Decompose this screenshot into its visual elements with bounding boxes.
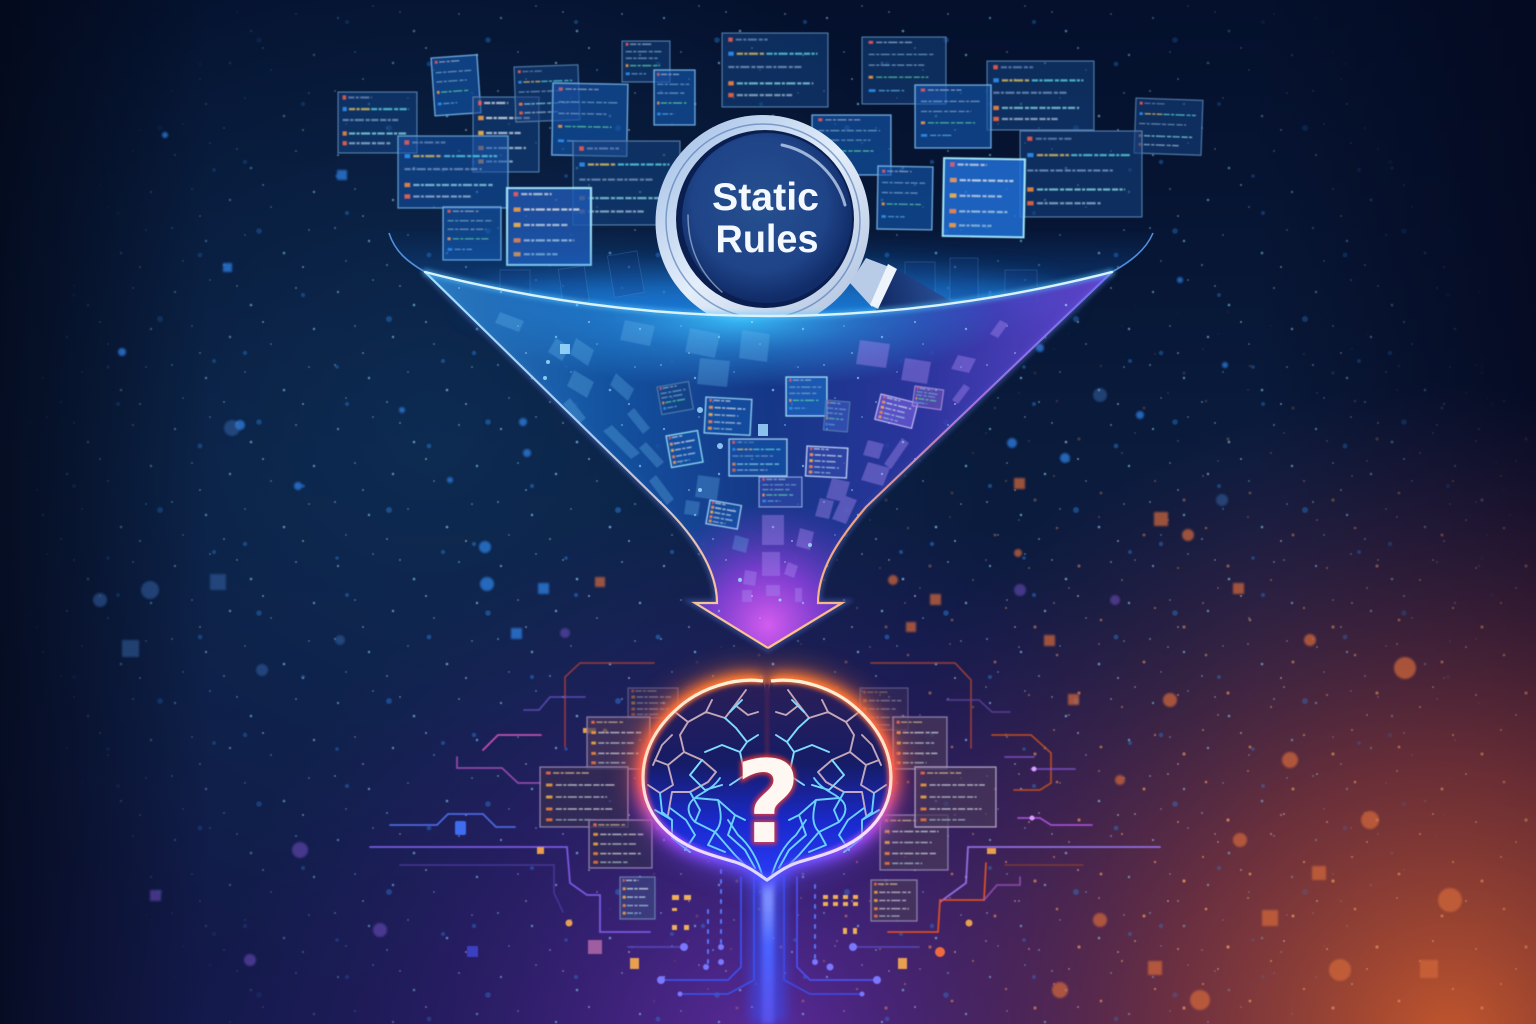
falling document 1	[786, 377, 827, 416]
magnifier label: Static Rules: Static	[712, 176, 819, 219]
document card 15	[943, 158, 1025, 237]
funnel front rim highlight	[425, 272, 1112, 316]
document card 10	[987, 61, 1094, 130]
document card 12	[812, 115, 891, 175]
brain document 1	[628, 688, 678, 718]
brain veins	[648, 690, 886, 878]
falling document 9	[823, 400, 850, 432]
funnel body	[420, 260, 1120, 655]
funnel cone and arrow	[420, 260, 1120, 655]
document card 2	[431, 55, 481, 116]
document card 14	[1020, 131, 1142, 217]
brain document 9	[915, 767, 996, 827]
lens highlights	[688, 145, 845, 292]
magnifier label: Static Rules	[713, 182, 818, 252]
documents falling inside funnel	[657, 377, 944, 529]
falling document 4	[805, 446, 848, 478]
falling document 6	[759, 477, 802, 507]
background documents cloud	[338, 33, 1203, 265]
falling document 10	[875, 394, 918, 428]
document card 19	[443, 207, 501, 260]
document card 13	[1134, 98, 1203, 155]
funnel left edge	[425, 272, 768, 648]
brain central fissure	[764, 684, 770, 772]
document card 5	[552, 83, 628, 156]
brain document 7	[893, 717, 947, 769]
brain document 10	[871, 880, 917, 921]
falling document 3	[729, 439, 787, 476]
brain document 5	[620, 877, 655, 919]
funnel right edge	[768, 272, 1112, 648]
document card 7	[654, 70, 695, 125]
document card 20	[507, 188, 591, 265]
glowing brain	[643, 680, 891, 880]
document card 1	[338, 92, 417, 153]
document card 11	[915, 85, 991, 148]
brain body	[643, 680, 891, 880]
falling document 7	[706, 500, 742, 529]
magnifier ring	[656, 115, 870, 329]
funnel bowl rim	[389, 225, 1153, 330]
magnifier lens	[682, 133, 852, 303]
document card 17	[398, 136, 508, 208]
document card 3	[473, 97, 539, 172]
brain wide halo	[643, 680, 891, 880]
document card 9	[862, 37, 946, 104]
question mark: ?	[735, 736, 801, 869]
brain outline	[643, 680, 891, 880]
brain document 8	[880, 815, 948, 870]
magnifier handle	[850, 258, 952, 310]
funnel faint document shards	[495, 312, 770, 553]
brain document 4	[589, 820, 652, 868]
brain outline halo	[643, 680, 891, 880]
brain document 6	[860, 688, 908, 730]
brain document 3	[540, 767, 628, 827]
document card 16	[877, 166, 933, 230]
falling document 5	[666, 430, 703, 468]
magnifier label: Static Rules: Rules	[716, 218, 818, 261]
brain outer glow	[643, 680, 891, 880]
bokeh particles	[93, 132, 1462, 1010]
brain document 2	[587, 717, 650, 769]
documents around brain	[540, 688, 996, 921]
brain circuit traces	[370, 663, 1160, 994]
document card 6	[622, 41, 670, 82]
question mark: ?	[735, 736, 801, 869]
document card 4	[514, 65, 580, 122]
falling document 8	[657, 381, 693, 415]
falling document 11	[912, 386, 944, 410]
document card 18	[573, 141, 680, 225]
document card 8	[722, 33, 828, 107]
light beam stem	[750, 868, 786, 1024]
funnel glow edge	[425, 272, 1112, 648]
magnifying glass	[656, 115, 954, 335]
funnel dot particles	[543, 344, 812, 602]
circuit nodes and chips	[455, 728, 1036, 996]
falling document 2	[704, 397, 752, 435]
